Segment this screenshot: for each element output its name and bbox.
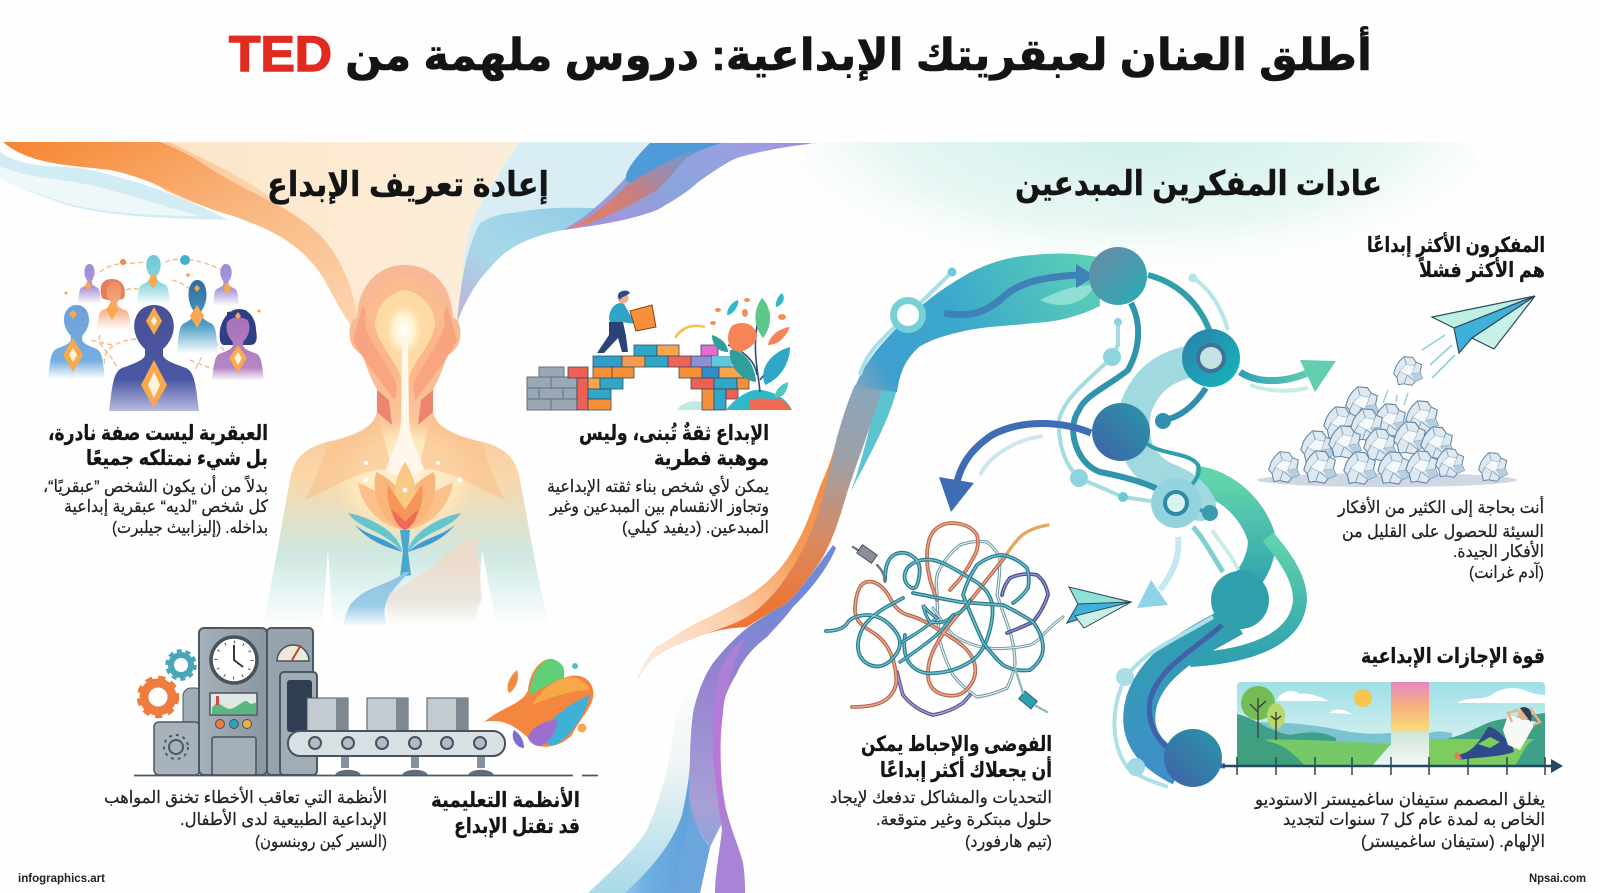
block: confidence	[547, 421, 769, 538]
block: breaks body: الخاص به لمدة عام كل 7 سنوات لتجديد	[1283, 810, 1545, 829]
block: education body: الإبداعية الطبيعية لدى الأطفال.	[180, 809, 387, 829]
block: genius: كل شخص ”لديه“ عبقرية إبداعية	[64, 497, 269, 516]
title: TED	[229, 26, 332, 82]
illustration: sabbatical scene	[1237, 682, 1545, 766]
icon: colour splash	[484, 659, 593, 748]
icon: crumpled paper pile	[1257, 357, 1517, 487]
icon: small paper plane	[1067, 587, 1131, 628]
block: education body: (السير كين روبنسون)	[255, 832, 387, 851]
block: chaos: التحديات والمشاكل تدفعك لإيجاد	[830, 788, 1052, 807]
title: أطلق العنان لعبقريتك الإبداعية: دروس ملهمة من	[345, 26, 1372, 81]
timeline	[1223, 757, 1563, 775]
network of winding paths	[860, 272, 1310, 787]
panel: habits of creative thinkers	[588, 142, 1563, 893]
block: breaks heading: قوة الإجازات الإبداعية	[1361, 645, 1545, 668]
background glow	[809, 142, 1456, 248]
arrow heads	[939, 264, 1336, 608]
block: education body: الأنظمة التي تعاقب الأخطاء تخنق المواهب	[104, 787, 387, 808]
block: failure body: السيئة للحصول على القليل من	[1342, 522, 1544, 541]
central figure silhouette	[262, 265, 550, 627]
block: chaos: حلول مبتكرة وغير متوقعة.	[876, 810, 1052, 829]
block: confidence: المبدعين. (ديفيد كيلي)	[622, 518, 769, 538]
icon: group of people	[48, 255, 264, 411]
block: genius: بل شيء نمتلكه جميعًا	[86, 447, 268, 470]
block: failure body: الأفكار الجيدة.	[1453, 541, 1544, 561]
icon: paper plane	[1422, 296, 1535, 378]
icon: builder with bricks	[527, 291, 792, 410]
block: failure body: (آدم غرانت)	[1469, 561, 1544, 582]
block: education body	[104, 787, 387, 851]
block: failure heading	[1367, 231, 1545, 282]
heading: إعادة تعريف الإبداع	[267, 166, 549, 205]
block: chaos: (تيم هارفورد)	[965, 832, 1052, 852]
flowing ribbon down the page	[588, 254, 1100, 893]
panel: redefining creativity	[0, 142, 817, 851]
icon: tangled wires	[826, 523, 1063, 715]
block: confidence: وتجاوز الانقسام بين المبدعين وغير	[549, 497, 769, 516]
block: confidence: يمكن لأي شخص بناء ثقته الإبداعية	[547, 476, 769, 497]
block: genius: العبقرية ليست صفة نادرة،	[48, 422, 268, 445]
lotus flower	[348, 462, 461, 577]
block: breaks body	[1254, 790, 1545, 852]
block: failure body: أنت بحاجة إلى الكثير من الأفكار	[1337, 496, 1544, 517]
block: confidence: موهبة فطرية	[654, 447, 769, 470]
block: breaks body: الإلهام. (ستيفان ساغميستر)	[1361, 832, 1545, 852]
block: education heading	[431, 786, 580, 838]
icon: factory machine	[134, 628, 598, 776]
flowing ribbons and funnel	[0, 142, 817, 335]
heading: عادات المفكرين المبدعين	[1015, 165, 1382, 204]
block: genius: بداخله. (إليزابيث جيلبرت)	[112, 518, 268, 537]
icon: clock	[211, 637, 257, 683]
block: chaos	[830, 733, 1052, 852]
block: genius	[43, 422, 269, 537]
block: education heading: الأنظمة التعليمية	[431, 786, 580, 812]
block: failure heading: هم الأكثر فشلاً	[1419, 256, 1545, 282]
block: failure body	[1337, 496, 1544, 582]
block: education heading: قد تقتل الإبداع	[454, 815, 580, 838]
block: chaos: أن يجعلاك أكثر إبداعًا	[880, 755, 1052, 782]
block: chaos: الفوضى والإحباط يمكن	[861, 733, 1052, 756]
network nodes	[890, 247, 1269, 787]
credit left: infographics.art	[18, 871, 105, 885]
block: failure heading: المفكرون الأكثر إبداعًا	[1367, 231, 1545, 257]
block: genius: بدلاً من أن يكون الشخص ”عبقريًا“،	[43, 475, 268, 496]
credit right: Npsai.com	[1529, 871, 1586, 885]
block: confidence: الإبداع ثقةٌ تُبنى، وليس	[579, 421, 769, 445]
block: breaks body: يغلق المصمم ستيفان ساغميستر الاستوديو	[1254, 790, 1545, 810]
